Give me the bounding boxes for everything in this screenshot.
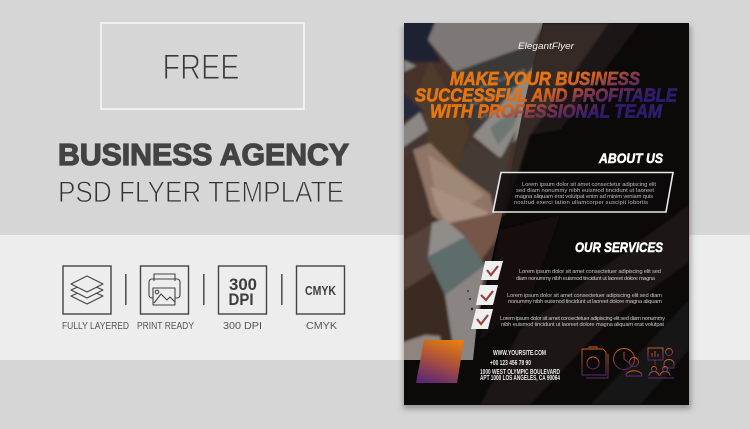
flyer bbox=[395, 15, 689, 405]
icon: layers bbox=[71, 276, 103, 304]
our services heading: OUR SERVICES bbox=[575, 239, 664, 255]
about us heading: ABOUT US bbox=[598, 150, 664, 166]
service 1 bbox=[481, 261, 661, 282]
divider bbox=[203, 274, 205, 305]
contact details: +00 123 456 78 90 bbox=[490, 360, 531, 367]
contact details: WWW.YOURSITE.COM bbox=[493, 350, 546, 357]
flyer headline: SUCCESSFUL AND PROFITABLE bbox=[415, 84, 678, 106]
service 3: Lorem ipsum dolor sit amet consectetuer adipiscing elit sed diam nonummy bbox=[500, 316, 665, 322]
photo: keyboard bbox=[456, 46, 535, 132]
service 3: nibh euismod tincidunt ut laoreet dolore magna aliquam erat volutpat bbox=[501, 322, 664, 328]
free badge bbox=[101, 23, 304, 109]
about us box bbox=[493, 172, 673, 212]
flyer headline: MAKE YOUR BUSINESS bbox=[450, 68, 641, 89]
icon: document with badge bbox=[582, 347, 608, 378]
service 3 bbox=[471, 309, 665, 329]
icon: clock and people bbox=[614, 348, 642, 376]
flyer shadow bbox=[403, 26, 691, 409]
feature: 300 dpi: DPI bbox=[228, 290, 254, 309]
about us box: sed diam nonummy nibh euismod tincidunt ut laoreet bbox=[516, 188, 654, 194]
photo: dark sleeves bbox=[404, 23, 440, 63]
feature: cmyk: CMYK bbox=[305, 284, 336, 298]
about us box: magna aliquam erat volutpat enim ad minim veniam quis bbox=[515, 194, 653, 200]
photo: trackpad bbox=[473, 62, 538, 158]
photo: bottom-left fingers bbox=[404, 333, 442, 360]
service 2 bbox=[476, 285, 662, 305]
icon: presentation board and audience bbox=[648, 348, 674, 378]
feature: fully layered: FULLY LAYERED bbox=[62, 321, 129, 332]
feature: 300 dpi: 300 DPI bbox=[223, 320, 262, 332]
icon: printer bbox=[149, 274, 180, 305]
photo: grey column bbox=[445, 265, 485, 365]
feature: fully layered bbox=[62, 266, 129, 332]
orange square bbox=[416, 340, 464, 383]
divider bbox=[125, 274, 127, 305]
service 1: Lorem ipsum dolor sit amet consectetuer adipiscing elit sed bbox=[519, 269, 661, 275]
photo: laptop lid bbox=[426, 23, 543, 74]
feature: cmyk bbox=[296, 266, 344, 332]
feature: 300 dpi: 300 bbox=[229, 275, 257, 294]
light band bbox=[0, 235, 750, 360]
photo: white document bbox=[428, 219, 466, 258]
service 2: nonummy nibh euismod tincidunt ut laoreet dolore magna aliquam bbox=[508, 299, 662, 305]
feature: print ready bbox=[137, 266, 194, 332]
photo: veiled strip bbox=[457, 132, 516, 203]
about us box: Lorem ipsum dolor sit amet consectetur adipiscing elit bbox=[522, 182, 656, 188]
feature: cmyk: CMYK bbox=[306, 320, 337, 332]
feature: 300 dpi bbox=[218, 266, 266, 332]
service 2: Lorem ipsum dolor sit amet consectetuer adipiscing elit sed diam bbox=[507, 293, 662, 299]
flyer brand: ElegantFlyer bbox=[518, 41, 575, 51]
flyer headline bbox=[415, 68, 678, 122]
feature: print ready: PRINT READY bbox=[137, 321, 194, 332]
photo: paper corner bbox=[404, 60, 416, 72]
about us box: nostrud exerci tation ullamcorper suscipit lobortis bbox=[514, 200, 648, 206]
photo: black pins bbox=[467, 290, 469, 292]
free badge: FREE bbox=[162, 48, 240, 87]
dark diagonal sweeps bbox=[480, 23, 689, 405]
photo: cuff and watch bbox=[404, 110, 430, 149]
service 1: diam nonummy nibh euismod tincidunt ut laoreet dolore magna bbox=[516, 276, 656, 282]
contact details: 1000 WEST OLYMPIC BOULEVARD bbox=[480, 369, 560, 376]
photo: desk and handshake bbox=[404, 23, 543, 360]
contact details bbox=[480, 350, 560, 382]
photo: wood desk bbox=[404, 23, 543, 343]
contact details: APT 1000 LOS ANGELES, CA 90064 bbox=[480, 375, 560, 382]
title: BUSINESS AGENCY bbox=[58, 137, 349, 172]
photo: hands bbox=[412, 142, 496, 222]
divider bbox=[281, 274, 283, 305]
flyer headline: WITH PROFESSIONAL TEAM bbox=[430, 100, 663, 122]
subtitle: PSD FLYER TEMPLATE bbox=[58, 176, 344, 209]
photo: blue-grey document bbox=[427, 237, 485, 295]
